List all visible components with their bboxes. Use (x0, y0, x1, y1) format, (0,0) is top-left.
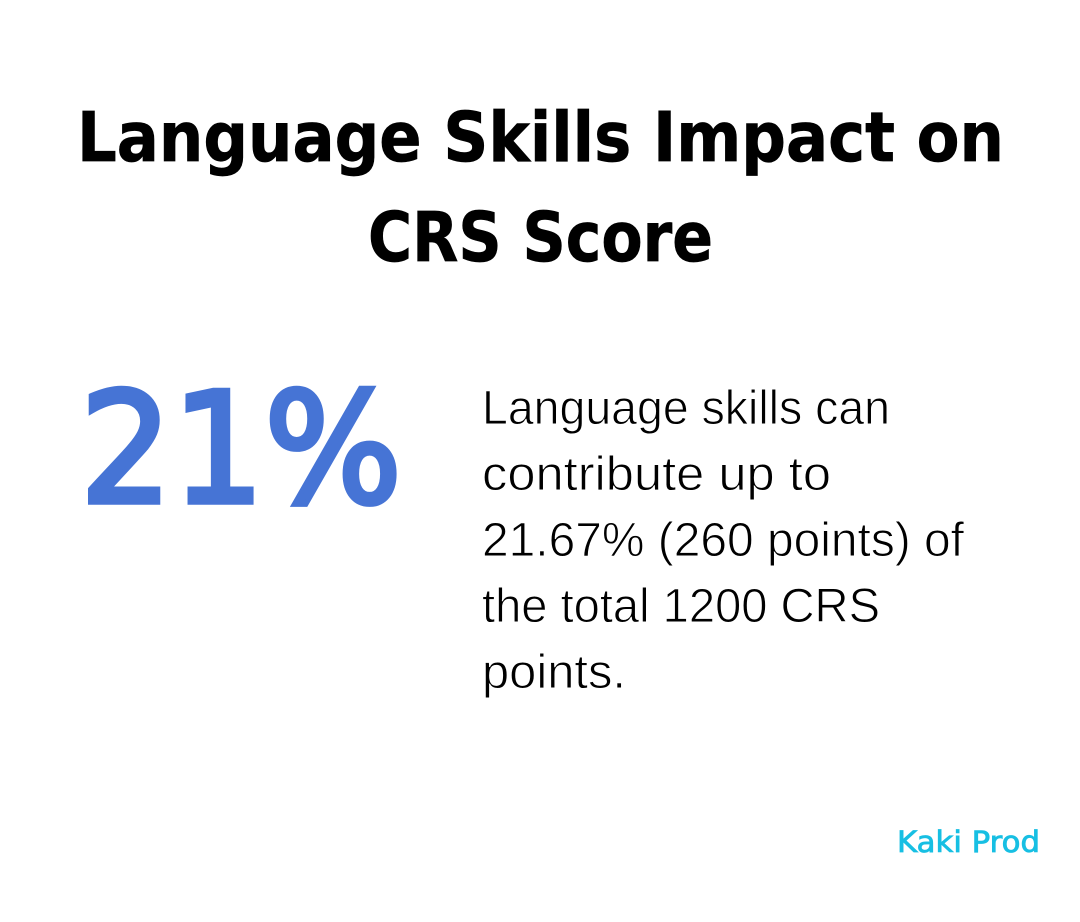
description text (482, 382, 965, 699)
description text: points. (482, 646, 626, 699)
title (77, 98, 1004, 278)
title: CRS Score (368, 198, 713, 278)
logo: Kaki Prod: Kaki Prod (897, 825, 1040, 859)
big stat: 21%: 21% (80, 361, 402, 539)
description text: the total 1200 CRS (482, 580, 880, 633)
description text: contribute up to (482, 448, 831, 501)
title: Language Skills Impact on (77, 98, 1004, 178)
description text: 21.67% (260 points) of (482, 514, 965, 567)
description text: Language skills can (482, 382, 890, 435)
